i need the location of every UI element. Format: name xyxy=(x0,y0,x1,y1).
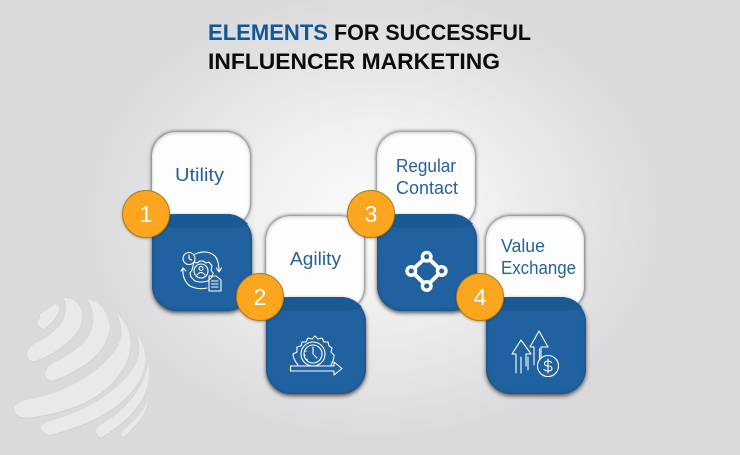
panel: element 4 value exchange: Exchange xyxy=(501,258,576,278)
badge: number 3: 3 xyxy=(365,201,377,227)
panel: element 1 utility: Utility xyxy=(175,165,224,185)
panel: element 3 regular contact: Regular xyxy=(396,156,456,176)
badge: number 2 xyxy=(236,273,284,321)
badge: number 1 xyxy=(122,190,170,238)
badge: number 3 xyxy=(347,190,395,238)
title: FOR SUCCESSFUL xyxy=(334,20,531,45)
badge: number 1: 1 xyxy=(140,201,152,227)
panel: element 3 regular contact: Contact xyxy=(396,178,458,198)
title: INFLUENCER MARKETING xyxy=(208,49,500,74)
badge: number 4 xyxy=(456,273,504,321)
badge: number 2: 2 xyxy=(254,284,266,310)
badge: number 4: 4 xyxy=(474,284,486,310)
panel: element 2 agility: Agility xyxy=(290,249,341,269)
panel: element 4 value exchange: Value xyxy=(501,236,545,256)
title: ELEMENTS xyxy=(208,20,328,45)
